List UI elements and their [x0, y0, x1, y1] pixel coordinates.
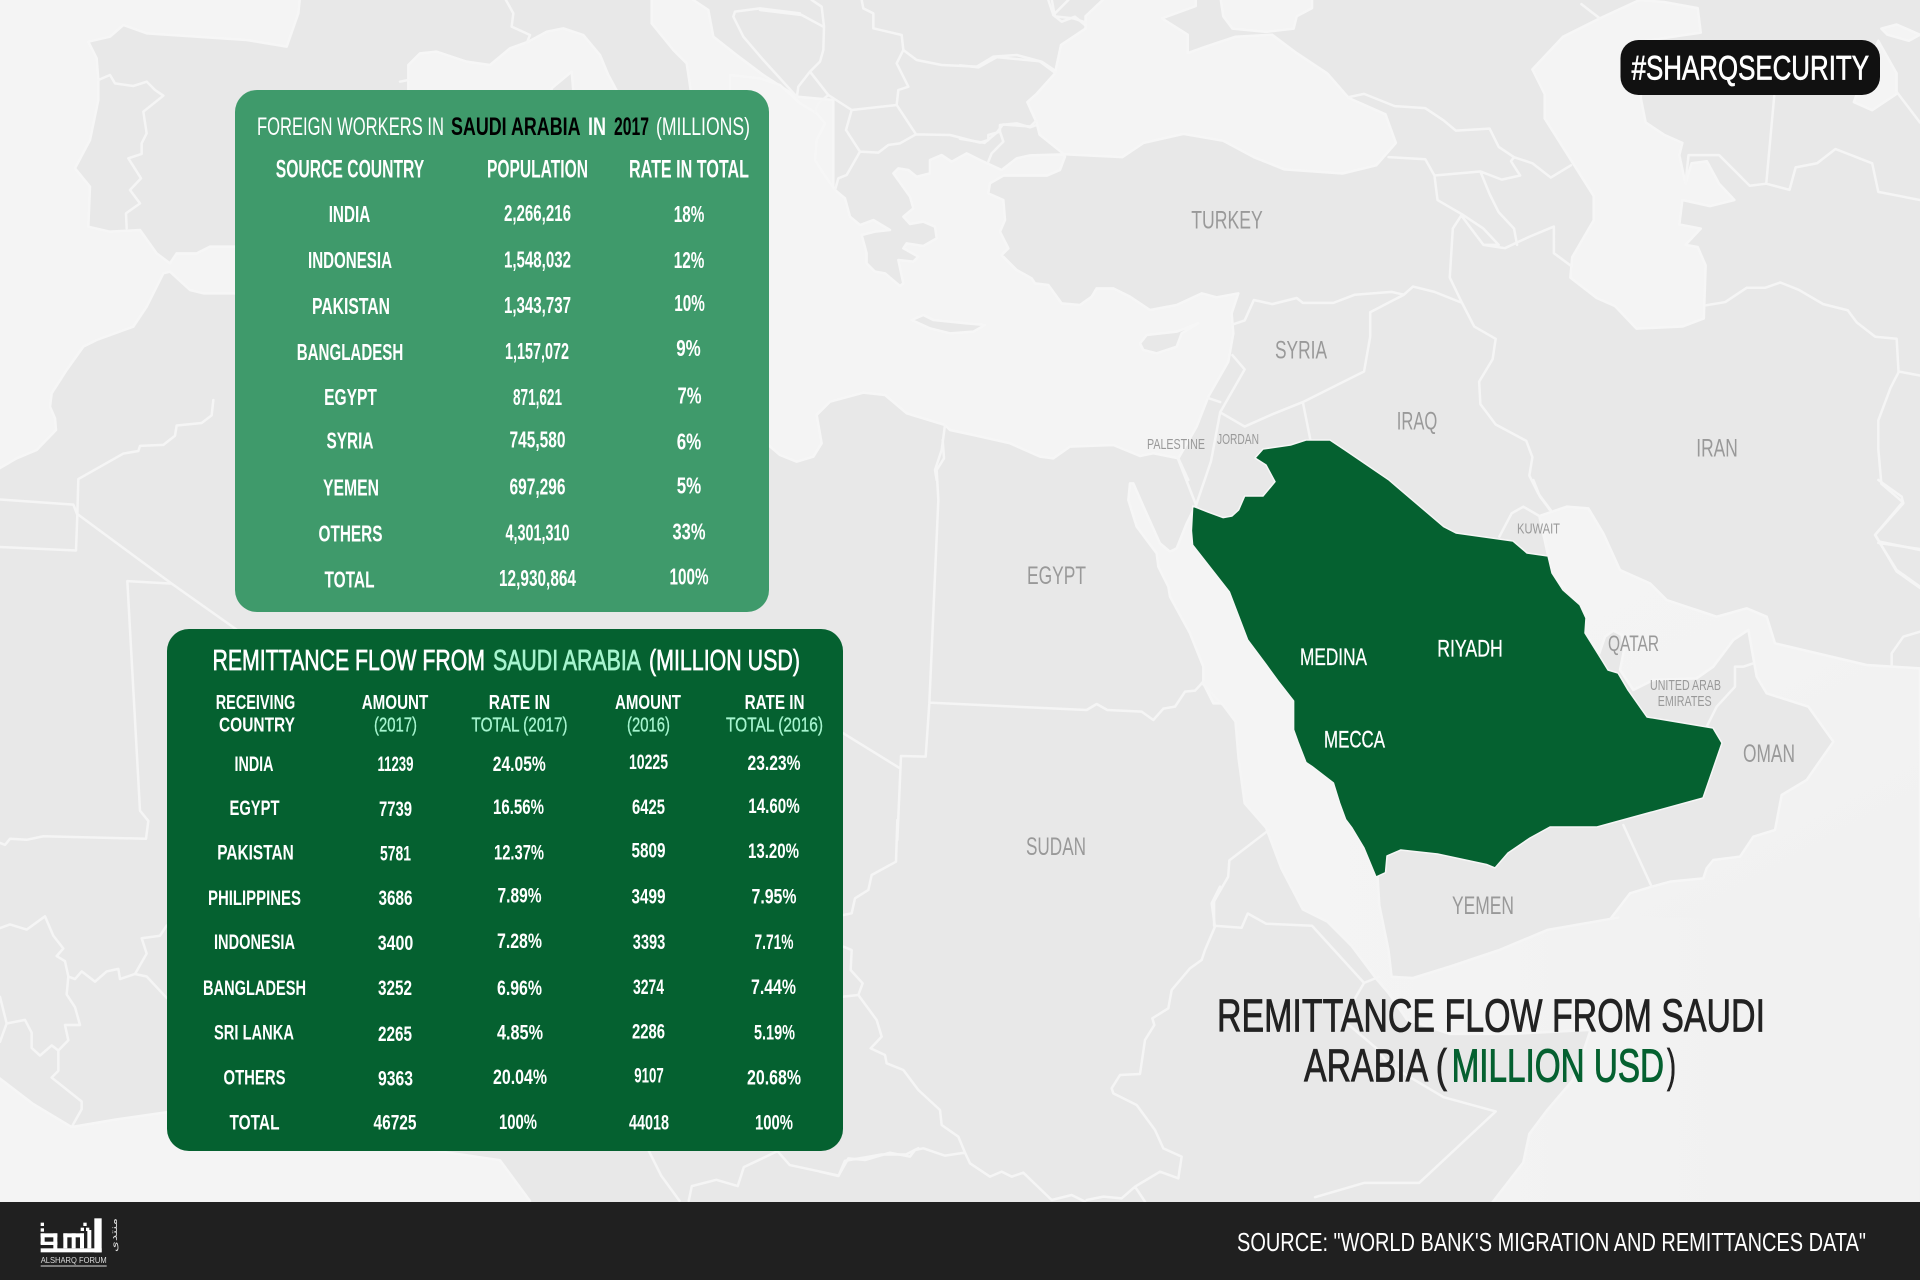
row: Egypt: EGYPT [324, 384, 377, 410]
map labels: country names: SUDAN [1026, 833, 1086, 861]
row: Pakistan [312, 290, 705, 319]
row: Bangladesh: BANGLADESH [203, 977, 306, 1000]
row: Bangladesh: 9% [676, 335, 701, 361]
table header [216, 692, 823, 736]
row: Sri Lanka: 5.19% [754, 1022, 795, 1044]
table header: (2016) [627, 714, 670, 736]
row: Syria: SYRIA [326, 428, 374, 454]
map labels: country names: IRAQ [1397, 408, 1437, 436]
row: India: 2,266,216 [504, 200, 571, 226]
icon: kufic logo mark [41, 1218, 102, 1252]
row: Others: 4,301,310 [506, 520, 570, 546]
row: Indonesia [308, 247, 704, 273]
title [1217, 990, 1765, 1092]
row: Pakistan: 12.37% [494, 841, 544, 864]
row: India: 24.05% [493, 753, 546, 776]
row: Total: 12,930,864 [499, 565, 576, 591]
row: Philippines [208, 884, 797, 910]
row: Others [318, 518, 706, 546]
row: Pakistan: PAKISTAN [312, 293, 390, 319]
map labels: country names: KUWAIT [1517, 520, 1560, 537]
row: Philippines: 7.95% [752, 886, 797, 909]
map labels: country names: EGYPT [1027, 562, 1086, 590]
row: Others: OTHERS [224, 1067, 286, 1090]
row: Bangladesh: 6.96% [497, 977, 542, 1000]
row: Total: 100% [499, 1111, 537, 1134]
row: India: 11239 [378, 753, 414, 776]
lake: Aral [1881, 24, 1920, 41]
panel title: (MILLIONS) [656, 113, 750, 141]
map labels: Saudi cities [1300, 636, 1503, 753]
row: Others: 20.04% [493, 1066, 547, 1089]
panel: remittance flow table [167, 629, 843, 1151]
row: Bangladesh: 3274 [633, 976, 664, 999]
map labels: country names: SYRIA [1275, 336, 1327, 364]
map labels: country names: EMIRATES [1658, 693, 1712, 710]
West African borders [0, 400, 530, 1216]
map labels: country names: UNITED ARAB [1650, 677, 1721, 694]
panel title: 2017 [614, 113, 649, 141]
title: ARABIA ( [1304, 1040, 1447, 1092]
row: Bangladesh: 3252 [378, 977, 412, 1000]
row: Egypt: 14.60% [748, 795, 800, 818]
row: Bangladesh: 1,157,072 [505, 338, 569, 364]
row: Others: 33% [672, 518, 706, 544]
table header [276, 156, 749, 184]
logo: Alsharq Forum: ALSHARQ FORUM [41, 1256, 107, 1265]
row: Yemen [323, 472, 701, 500]
table header: RECEIVING [216, 692, 295, 714]
row: Indonesia: 3400 [378, 932, 413, 955]
row: Total: 46725 [374, 1112, 417, 1135]
panel: foreign workers table [235, 90, 769, 612]
row: India [234, 751, 801, 776]
row: Indonesia: 7.28% [497, 930, 542, 953]
map labels: country names: IRAN [1696, 434, 1738, 462]
map labels: country names: TURKEY [1191, 207, 1263, 235]
logo: Alsharq Forum: منتدى [110, 1218, 120, 1252]
map labels: country names: QATAR [1608, 631, 1659, 656]
row: Sri Lanka: 4.85% [497, 1022, 543, 1044]
table header: COUNTRY [219, 714, 296, 736]
map labels: country names: JORDAN [1217, 431, 1259, 448]
row: Pakistan: 5781 [380, 843, 411, 866]
seas: eastern Mediterranean [730, 0, 1238, 480]
logo: Alsharq Forum [41, 1218, 120, 1266]
panel title: IN [588, 113, 606, 141]
row: Egypt: 871,621 [513, 384, 562, 410]
row: Sri Lanka: 2265 [378, 1023, 412, 1046]
footer bar [0, 1202, 1920, 1280]
table header: TOTAL (2017) [472, 714, 568, 736]
row: Total: TOTAL [324, 566, 374, 592]
row: India: INDIA [329, 201, 370, 227]
row: Bangladesh [203, 976, 796, 1000]
island: Cyprus [1140, 323, 1198, 353]
row: Others: OTHERS [318, 520, 382, 546]
row: Total: 100% [755, 1112, 793, 1135]
row: Egypt: EGYPT [230, 797, 280, 820]
table header: TOTAL (2016) [726, 714, 823, 736]
row: Egypt: 7% [678, 382, 702, 408]
row: Pakistan [217, 840, 799, 866]
row: Yemen: 5% [677, 472, 701, 498]
row: Total [324, 564, 708, 592]
row: Bangladesh: 7.44% [751, 976, 796, 999]
row: India [329, 200, 704, 227]
row: Total: 100% [670, 564, 708, 590]
table header: RATE IN [745, 692, 805, 714]
map labels: Saudi cities: RIYADH [1437, 636, 1503, 662]
panel title: (MILLION USD) [649, 645, 800, 677]
row: Others [224, 1064, 801, 1090]
country: Saudi Arabia highlighted in green [1191, 440, 1722, 877]
seas: Red Sea south, Gulf of Aden, Arabian Sea [1202, 681, 1920, 1202]
row: Pakistan: 5809 [632, 840, 666, 863]
row: Egypt [230, 795, 800, 821]
row: Pakistan: 10% [674, 290, 705, 316]
row: India: 23.23% [748, 752, 801, 775]
row: Total [230, 1111, 793, 1135]
panel title [257, 113, 750, 141]
table header: (2017) [374, 714, 417, 736]
row: Egypt: 16.56% [493, 796, 544, 819]
map labels: Saudi cities: MECCA [1324, 726, 1385, 753]
map labels: country names: PALESTINE [1147, 436, 1205, 453]
row: Others: 9107 [634, 1064, 664, 1088]
title: ) [1667, 1040, 1676, 1092]
row: Philippines: 3686 [378, 887, 412, 910]
map labels: country names [1026, 207, 1795, 920]
row: India: 10225 [629, 751, 668, 774]
row: Sri Lanka: SRI LANKA [214, 1022, 294, 1044]
table header: POPULATION [487, 156, 588, 184]
row: Indonesia: 7.71% [754, 931, 794, 954]
row: Syria: 745,580 [510, 426, 566, 452]
seas: Gulf of Lion and Adriatic [400, 0, 833, 200]
row: Egypt: 6425 [632, 796, 665, 819]
table header: SOURCE COUNTRY [276, 156, 424, 184]
panel title: REMITTANCE FLOW FROM [212, 645, 485, 677]
row: Sri Lanka [214, 1021, 795, 1046]
island: Crete [912, 315, 985, 333]
table header: RATE IN [489, 692, 550, 714]
row: Syria: 6% [677, 428, 701, 454]
panel title: SAUDI ARABIA [451, 113, 580, 141]
row: Sri Lanka: 2286 [632, 1021, 665, 1044]
row: Pakistan: 1,343,737 [504, 292, 571, 318]
row: Indonesia: INDONESIA [308, 247, 392, 273]
row: India: INDIA [234, 753, 274, 776]
panel title [212, 645, 800, 677]
row: Yemen: YEMEN [323, 474, 379, 500]
African borders [820, 820, 1220, 1202]
row: Philippines: 3499 [632, 886, 666, 909]
row: Pakistan: 13.20% [748, 840, 799, 863]
row: Total: 44018 [629, 1112, 669, 1135]
row: Indonesia: INDONESIA [214, 931, 295, 954]
row: Others: 9363 [378, 1067, 413, 1090]
seas: Red Sea upper part [843, 440, 1320, 840]
row: Total: TOTAL [230, 1112, 280, 1135]
panel title: SAUDI ARABIA [493, 645, 641, 677]
row: Indonesia: 1,548,032 [504, 247, 571, 273]
row: Bangladesh [297, 335, 701, 365]
hashtag badge [1620, 40, 1880, 95]
row: Yemen: 697,296 [510, 474, 566, 500]
table header: RATE IN TOTAL [629, 156, 749, 184]
table header: AMOUNT [362, 692, 428, 714]
title: MILLION USD [1452, 1040, 1664, 1092]
map labels: country names: OMAN [1743, 740, 1795, 768]
row: Egypt [324, 382, 702, 410]
row: Indonesia: 3393 [633, 931, 665, 954]
row: Bangladesh: BANGLADESH [297, 339, 403, 365]
row: Philippines: 7.89% [498, 884, 542, 907]
row: Pakistan: PAKISTAN [217, 841, 294, 864]
row: Indonesia [214, 930, 794, 955]
row: Indonesia: 12% [674, 247, 704, 273]
row: Egypt: 7739 [379, 798, 412, 821]
seas: Persian Gulf and Gulf of Oman [1499, 480, 1920, 922]
borders south of the table [649, 1148, 918, 1201]
seas: Black Sea, Azov, Caspian [960, 0, 1920, 588]
seas: Atlantic and western Mediterranean [0, 0, 300, 470]
map labels: country names: YEMEN [1452, 892, 1514, 920]
row: Philippines: PHILIPPINES [208, 887, 301, 910]
table header: AMOUNT [615, 692, 681, 714]
row: Syria [326, 426, 701, 454]
row: Others: 20.68% [747, 1067, 801, 1090]
row: India: 18% [674, 201, 704, 227]
map labels: Saudi cities: MEDINA [1300, 644, 1367, 671]
panel title: FOREIGN WORKERS IN [257, 113, 444, 141]
